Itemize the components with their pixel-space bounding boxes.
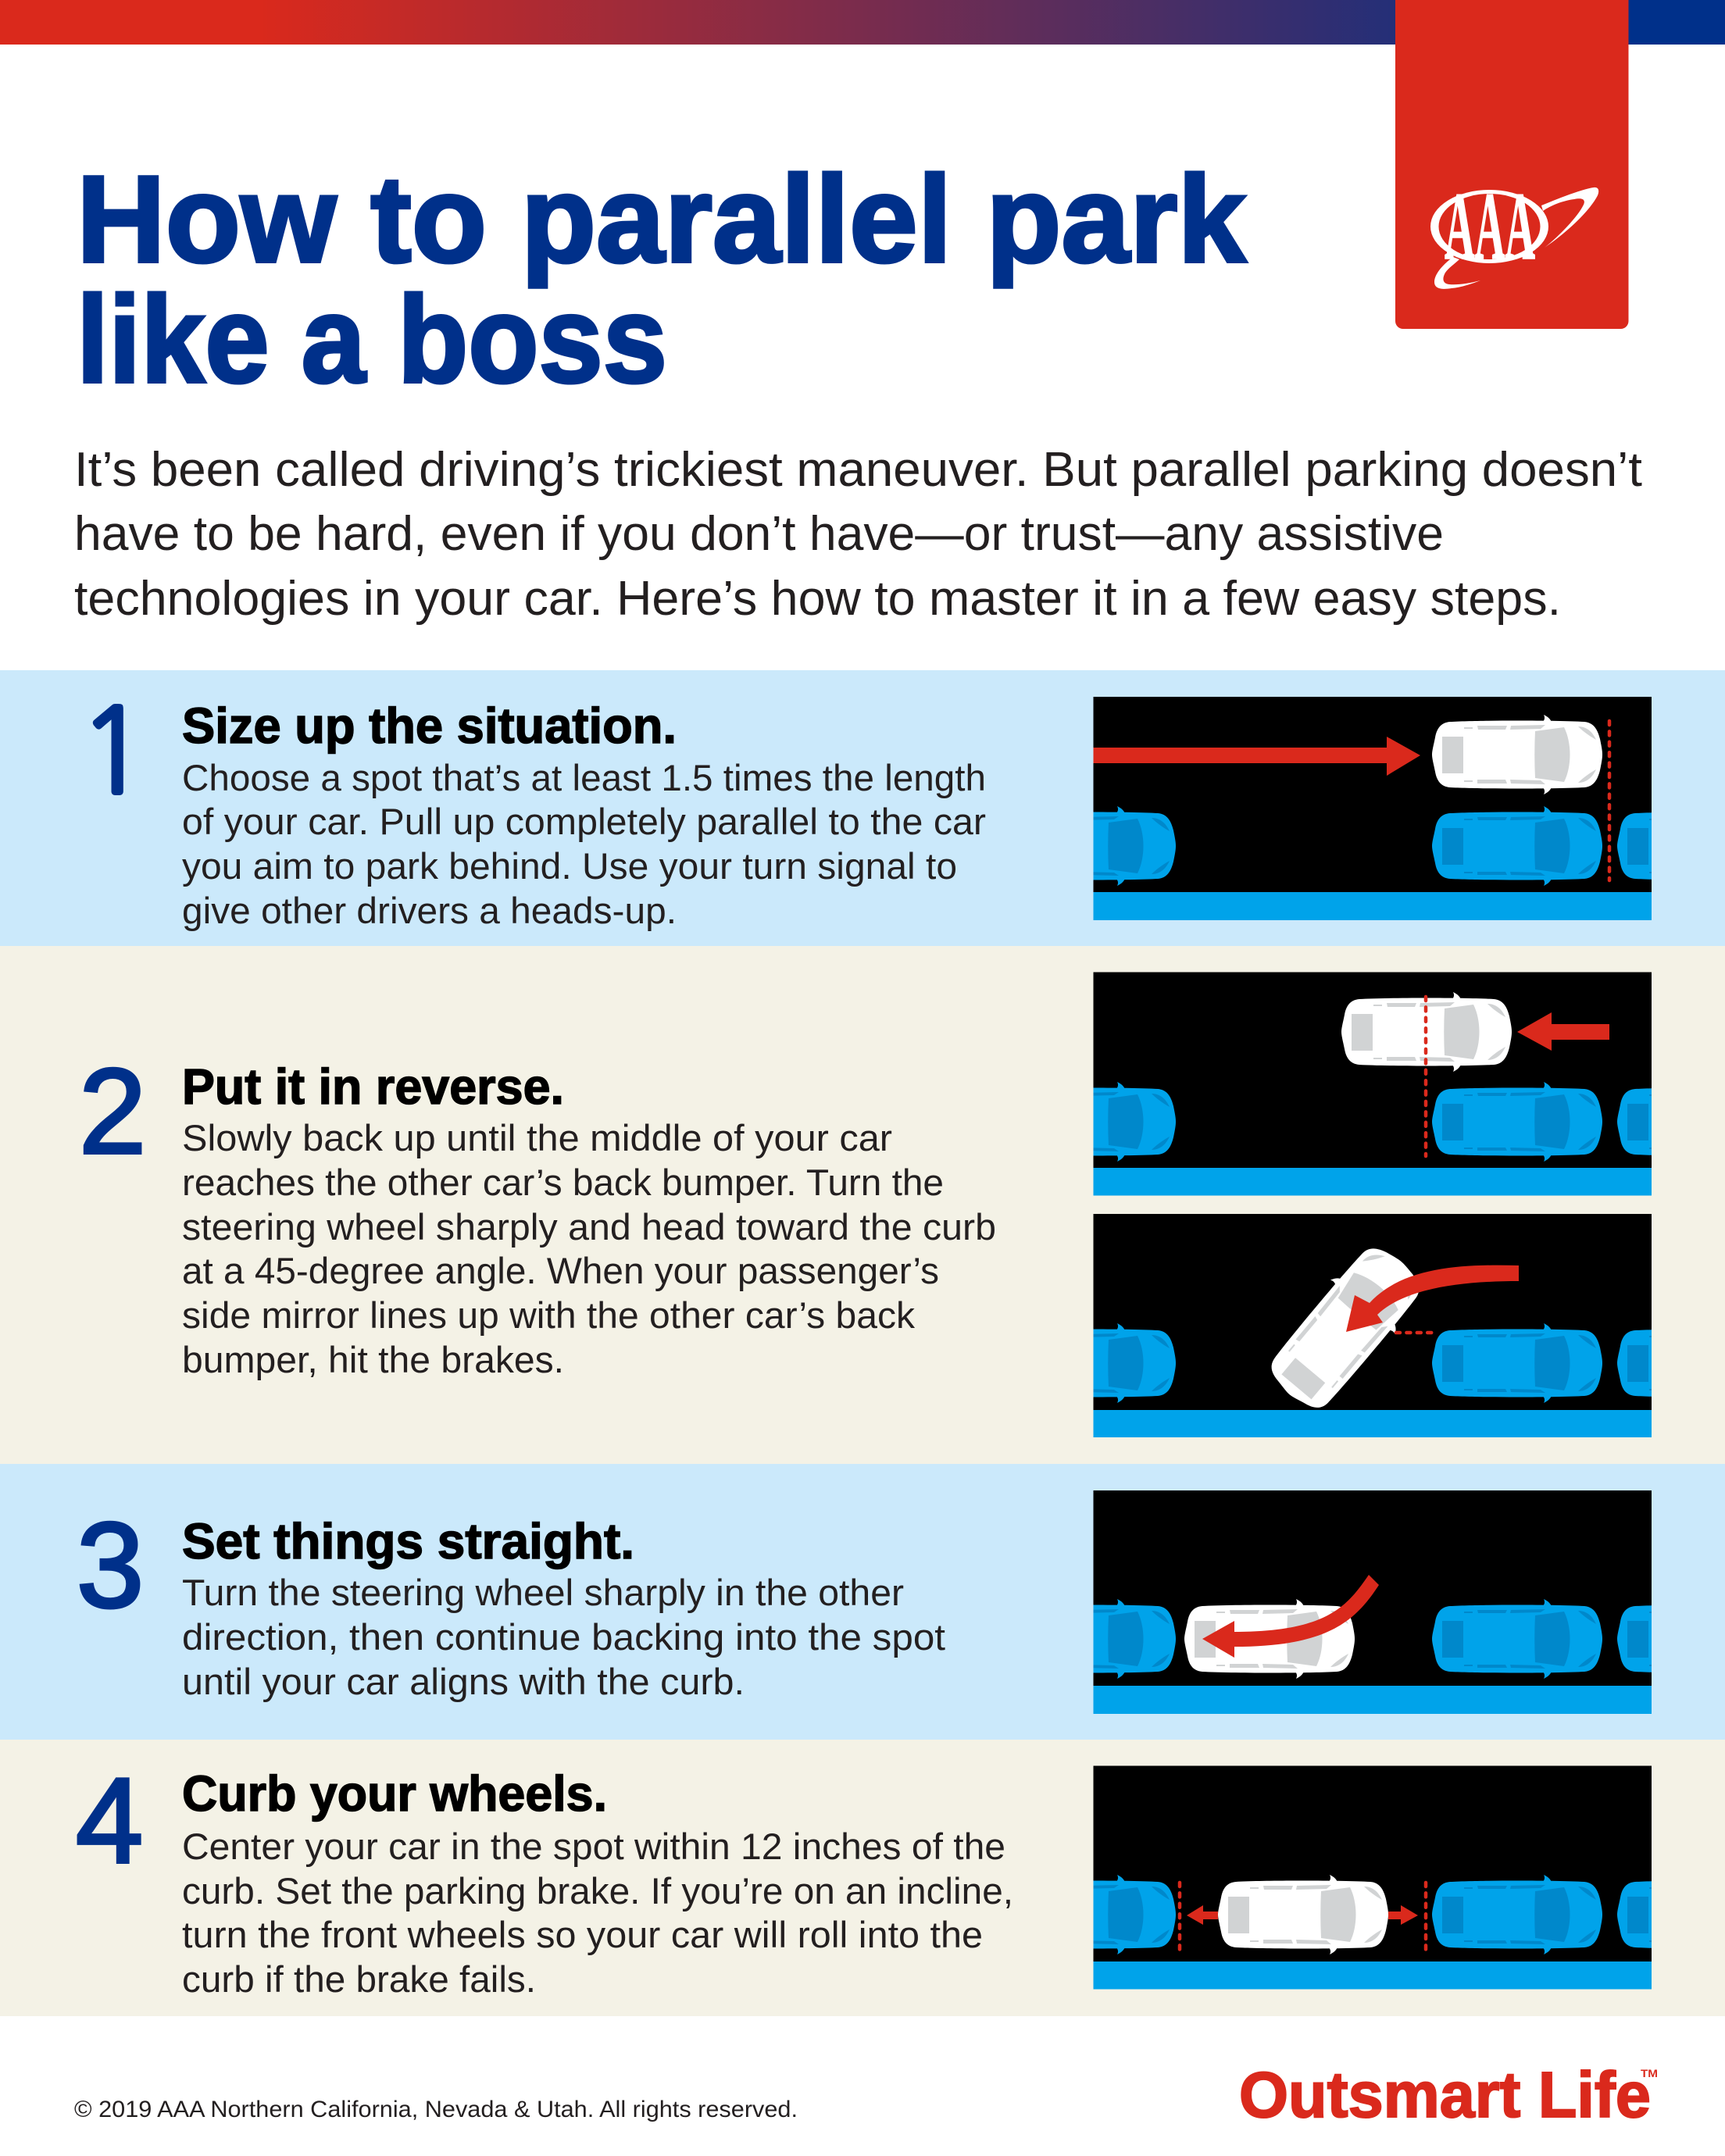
step 2 body text: at a 45-degree angle. When your passenger’s bbox=[182, 1250, 939, 1291]
step 4 body text: turn the front wheels so your car will roll into the bbox=[182, 1914, 983, 1955]
step 3 body text: Turn the steering wheel sharply in the other bbox=[182, 1572, 904, 1613]
step number 2: 2 bbox=[79, 1044, 146, 1179]
diagram: pull up alongside car bbox=[1094, 697, 1652, 920]
step 2 body text bbox=[182, 1117, 996, 1380]
top gradient bar bbox=[0, 0, 1725, 45]
AAA logo tab: AAA bbox=[1445, 173, 1535, 280]
diagram: back up to the other car's bumper bbox=[1094, 972, 1652, 1195]
step 1 body text: you aim to park behind. Use your turn signal to bbox=[182, 845, 957, 887]
panel: step 2 bbox=[0, 946, 1725, 1464]
step 4 body text bbox=[182, 1826, 1013, 2000]
diagram: centered in the spot bbox=[1094, 1765, 1652, 1989]
step number 1: 1 bbox=[78, 693, 149, 810]
Outsmart Life logo: TM bbox=[1641, 2067, 1658, 2079]
copyright footer: © 2019 AAA Northern California, Nevada & Utah. All rights reserved. bbox=[74, 2097, 798, 2122]
panel: step 4 bbox=[0, 1740, 1725, 2016]
step 4 heading: Curb your wheels. bbox=[182, 1765, 607, 1822]
step 1 body text: give other drivers a heads-up. bbox=[182, 890, 677, 931]
step number 4: 4 bbox=[76, 1753, 143, 1888]
intro text bbox=[74, 443, 1642, 626]
step 2 body text: Slowly back up until the middle of your car bbox=[182, 1117, 892, 1158]
panel: step 3 bbox=[0, 1464, 1725, 1740]
step 3 body text: direction, then continue backing into the spot bbox=[182, 1616, 945, 1658]
title: like a boss bbox=[77, 271, 667, 409]
intro text: technologies in your car. Here’s how to master it in a few easy steps. bbox=[74, 572, 1561, 626]
title: How to parallel park bbox=[77, 151, 1247, 288]
step 2 body text: side mirror lines up with the other car’s back bbox=[182, 1294, 916, 1336]
intro text: have to be hard, even if you don’t have—or trust—any assistive bbox=[74, 507, 1444, 561]
step 2 body text: bumper, hit the brakes. bbox=[182, 1339, 564, 1380]
step 3 body text: until your car aligns with the curb. bbox=[182, 1661, 745, 1702]
step 1 body text: of your car. Pull up completely parallel to the car bbox=[182, 801, 986, 842]
Outsmart Life logo: Outsmart Life bbox=[1239, 2058, 1651, 2131]
step number 3: 3 bbox=[77, 1497, 144, 1633]
step 2 body text: reaches the other car’s back bumper. Turn the bbox=[182, 1162, 944, 1203]
diagram: angle toward the curb bbox=[1094, 1214, 1652, 1437]
intro text: It’s been called driving’s trickiest maneuver. But parallel parking doesn’t bbox=[74, 443, 1642, 497]
AAA logo tab bbox=[1395, 0, 1628, 329]
panel: step 1 bbox=[0, 670, 1725, 946]
step 1 body text: Choose a spot that’s at least 1.5 times the length bbox=[182, 757, 986, 798]
step 3 heading: Set things straight. bbox=[182, 1513, 634, 1569]
step 2 body text: steering wheel sharply and head toward the curb bbox=[182, 1206, 996, 1248]
title bbox=[77, 151, 1247, 409]
step 4 body text: Center your car in the spot within 12 inches of the bbox=[182, 1826, 1005, 1867]
step 4 body text: curb. Set the parking brake. If you’re on an incline, bbox=[182, 1870, 1013, 1911]
step 2 heading: Put it in reverse. bbox=[182, 1058, 564, 1115]
step 1 heading: Size up the situation. bbox=[182, 698, 677, 754]
diagram: straighten into the spot bbox=[1094, 1490, 1652, 1714]
step 1 body text bbox=[182, 757, 986, 931]
step 4 body text: curb if the brake fails. bbox=[182, 1958, 536, 2000]
step 3 body text bbox=[182, 1572, 945, 1702]
